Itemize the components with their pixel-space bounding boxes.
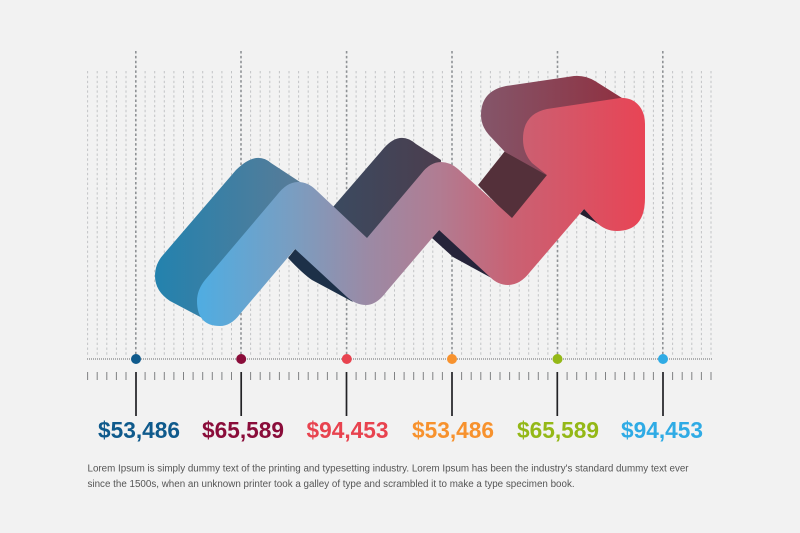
value labels: $53,486 [98, 417, 180, 443]
axis marker dots [131, 354, 668, 364]
description text: since the 1500s, when an unknown printer took a galley of type and scrambled it to make a type specimen book. [88, 479, 575, 490]
value labels: $65,589 [517, 417, 599, 443]
ruler ticks [88, 372, 711, 380]
value labels: $94,453 [306, 417, 389, 443]
dotted vertical grid [88, 71, 711, 356]
arrow: front face [197, 98, 645, 326]
description text: Lorem Ipsum is simply dummy text of the printing and typesetting industry. Lorem Ipsum has been the industry's standard dummy text ever [88, 464, 689, 474]
value labels: $94,453 [621, 417, 703, 443]
value labels [98, 417, 703, 443]
value labels: $53,486 [412, 417, 494, 443]
long ruler ticks [136, 372, 663, 416]
baseline axis [87, 358, 712, 360]
arrow: 3D extruded back faces [155, 76, 630, 320]
description text [88, 464, 689, 490]
value labels: $65,589 [202, 417, 284, 443]
main dotted vertical lines [136, 51, 663, 356]
